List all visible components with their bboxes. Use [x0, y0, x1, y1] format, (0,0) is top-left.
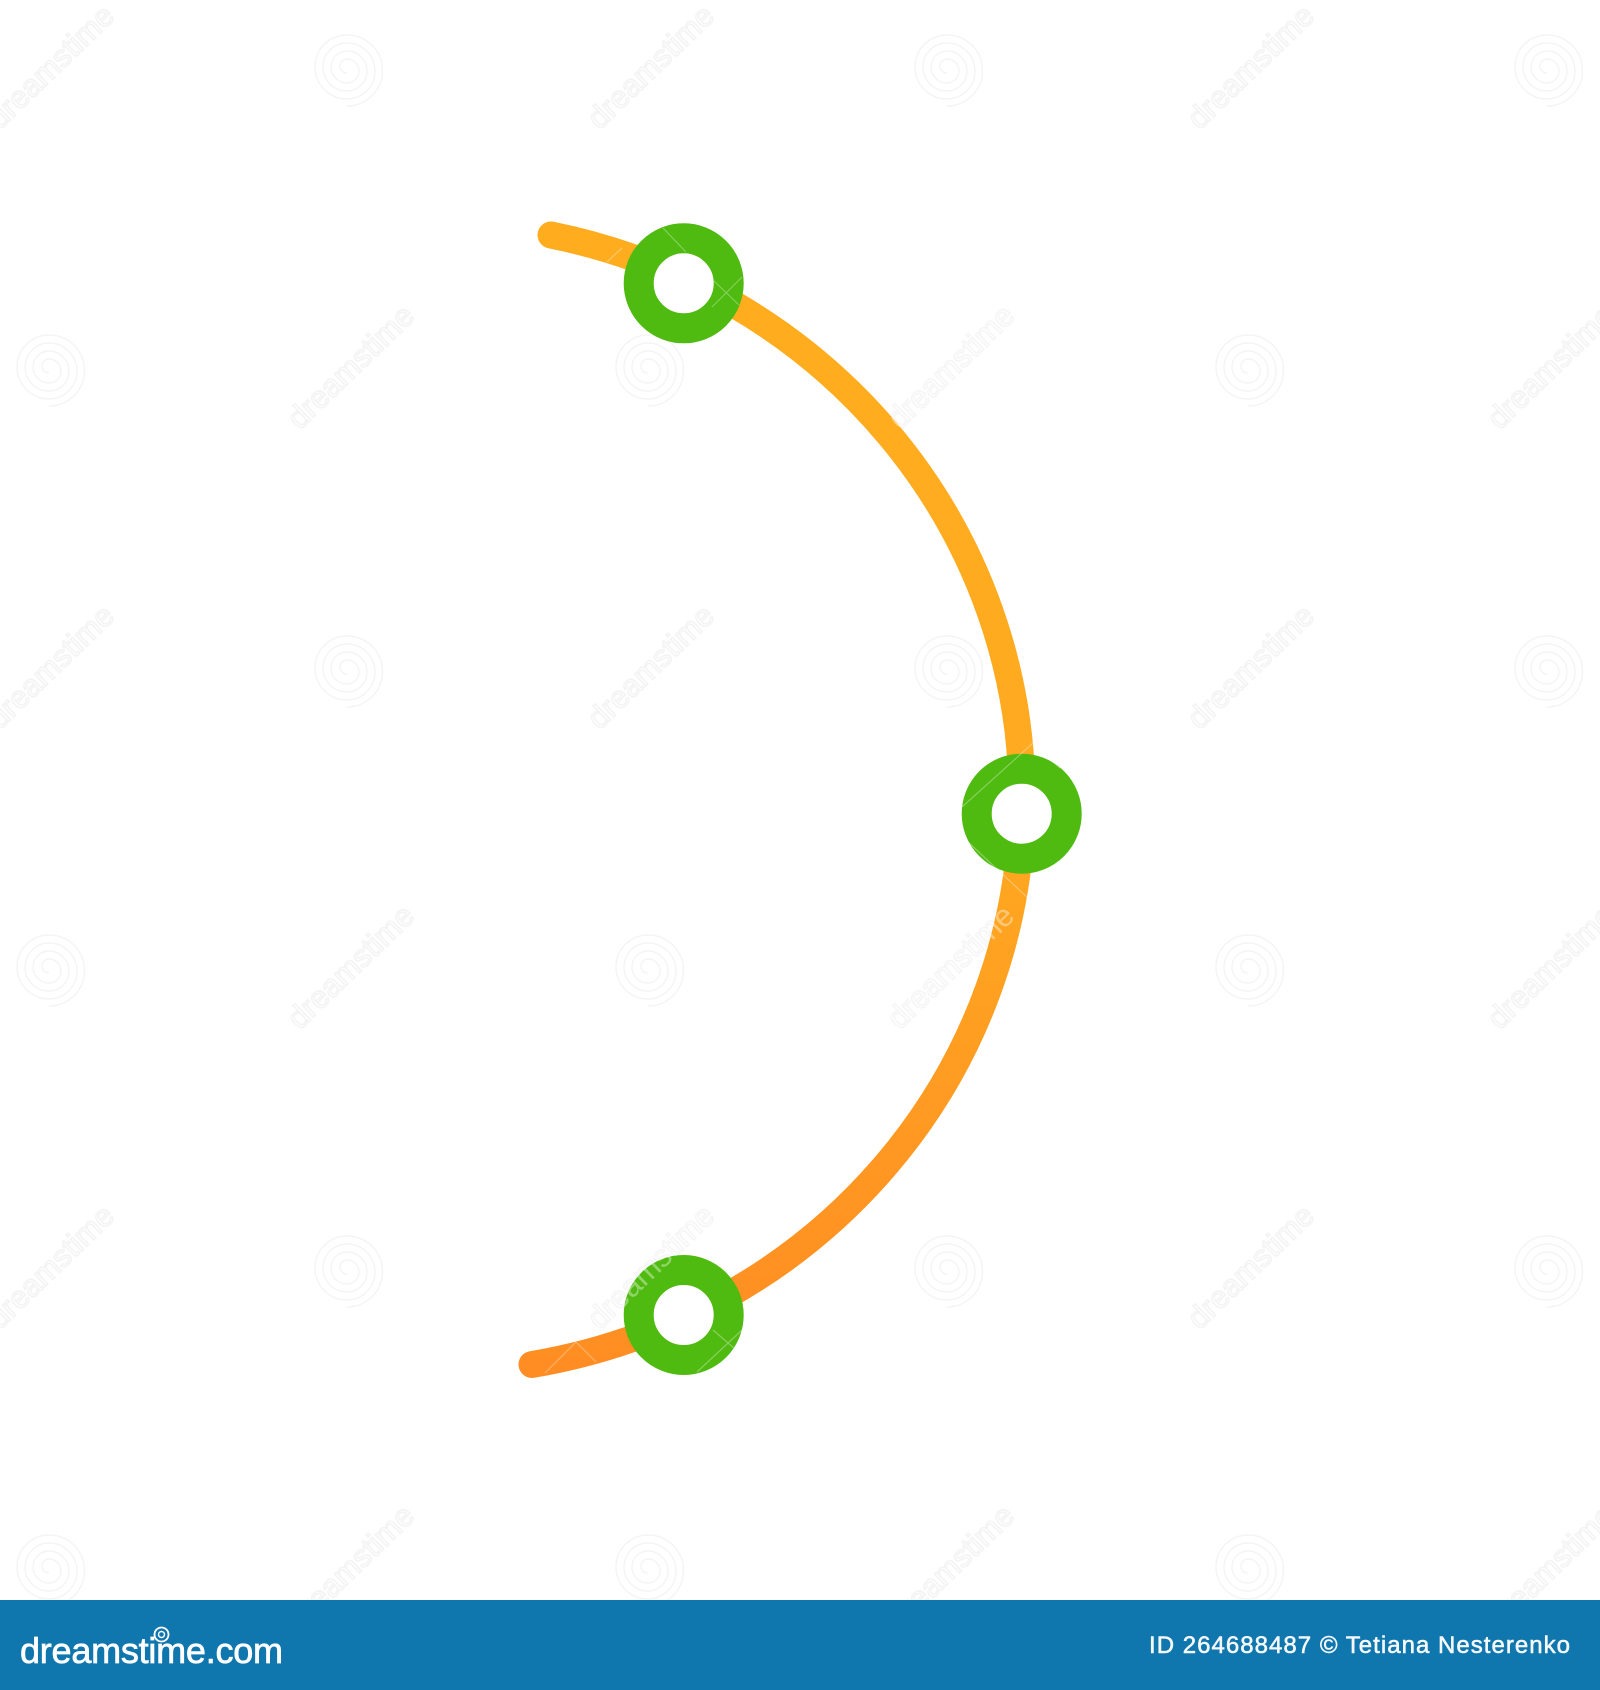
watermark pattern: dreamstime: [580, 0, 721, 135]
watermark overlay on shapes: dreamstime: [880, 298, 1021, 435]
brand logo text: dreamstime.com: [20, 1630, 283, 1671]
watermark overlay on shapes: dreamstime: [880, 898, 1021, 1035]
ring marker: middle: [977, 769, 1067, 859]
watermark overlay on shapes: dreamstime: [580, 1198, 721, 1335]
ring marker: top: [639, 238, 729, 328]
watermark pattern: dreamstime: [580, 1198, 721, 1335]
image credit: ID 264688487 © Tetiana Nesterenko: [1149, 1632, 1570, 1659]
orange arc: [532, 235, 1022, 1364]
watermark pattern: dreamstime: [880, 1498, 1021, 1635]
watermark pattern: dreamstime: [880, 898, 1021, 1035]
ring marker: bottom: [639, 1270, 729, 1360]
watermark pattern: dreamstime: [280, 298, 421, 435]
watermark pattern: dreamstime: [580, 598, 721, 735]
watermark pattern: dreamstime: [880, 298, 1021, 435]
watermark overlay on shapes: [545, 228, 1060, 1373]
watermark pattern: dreamstime: [1180, 598, 1321, 735]
watermark pattern: dreamstime: [1180, 1198, 1321, 1335]
watermark pattern: dreamstime: [280, 898, 421, 1035]
footer band: [0, 1600, 1600, 1690]
watermark pattern: dreamstime: [1180, 0, 1321, 135]
watermark pattern: dreamstime: [280, 1498, 421, 1635]
